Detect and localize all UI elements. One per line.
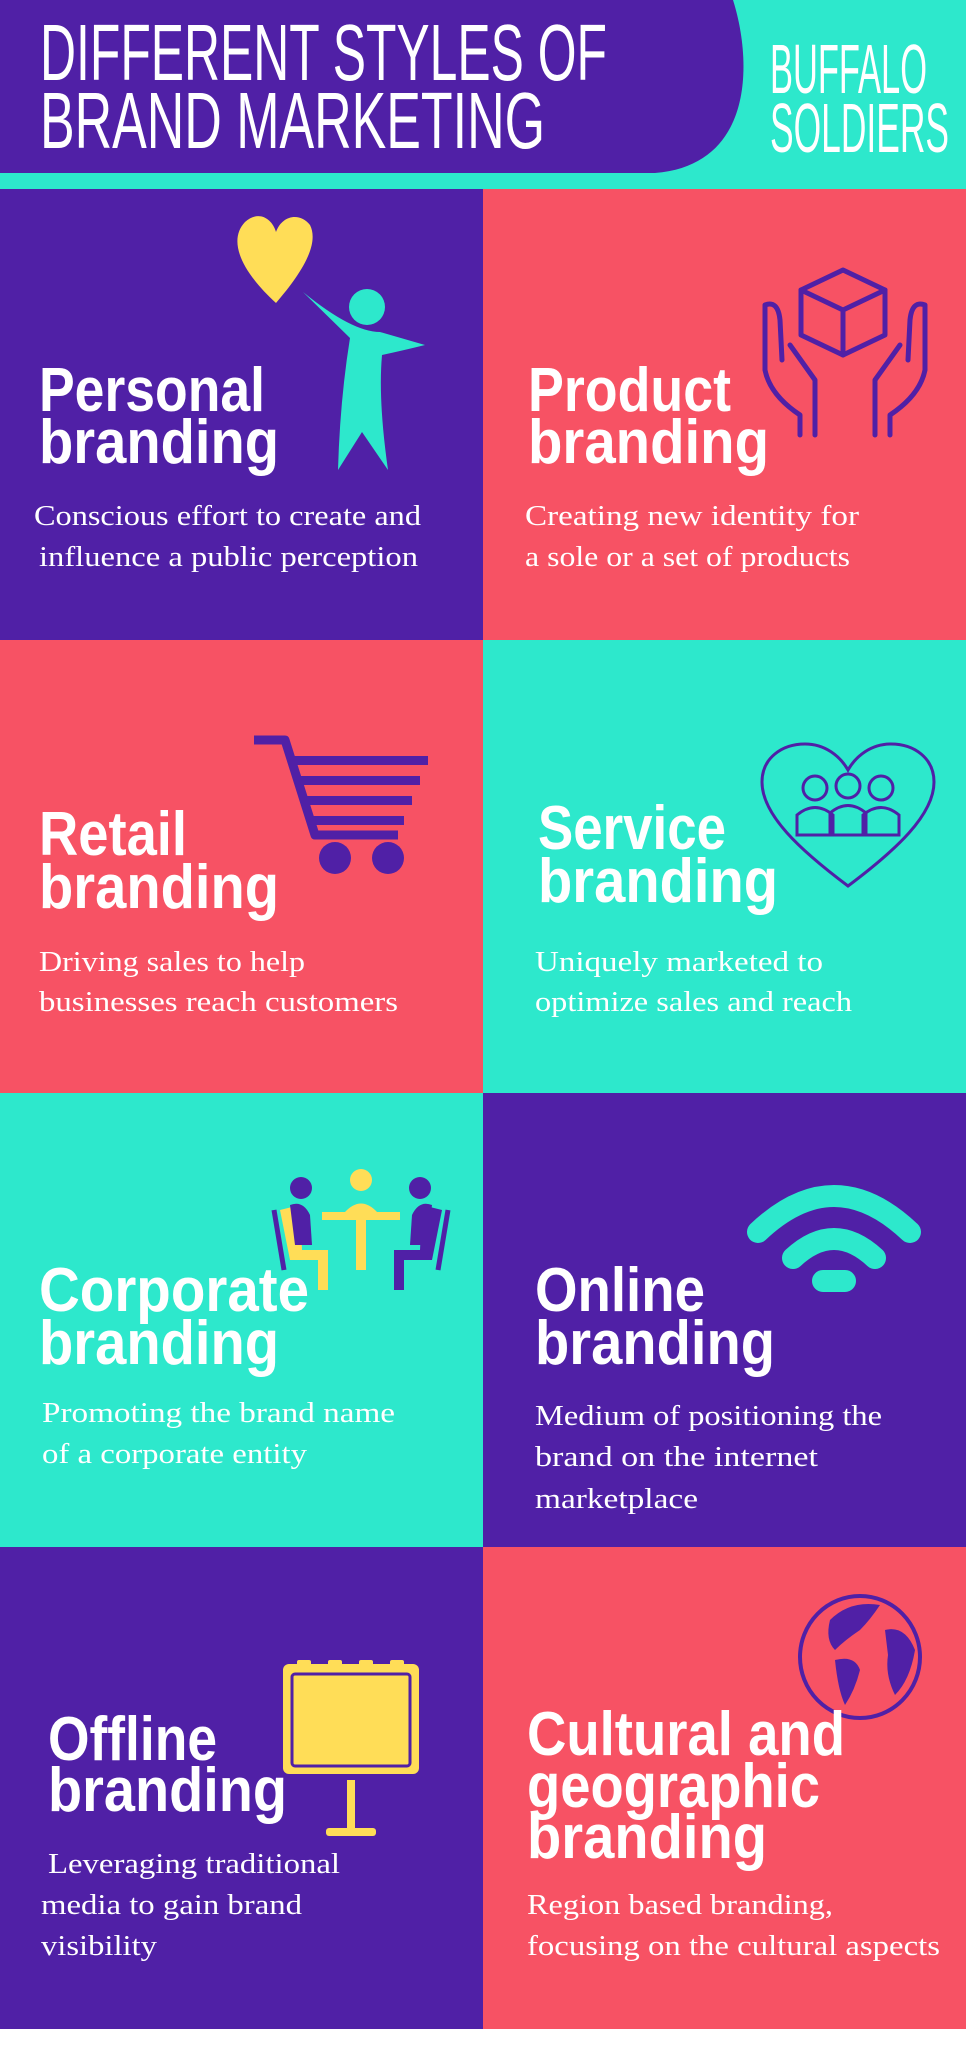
icon: billboard: [283, 1660, 419, 1836]
text block: Creating new identity for: [525, 500, 859, 532]
heading: Service: [538, 794, 726, 863]
heading: Cultural and: [527, 1700, 845, 1769]
text block: influence a public perception: [39, 541, 419, 573]
heading: branding: [48, 1756, 287, 1825]
heading: [528, 356, 769, 477]
text block: optimize sales and reach: [535, 986, 853, 1018]
text block: [41, 1848, 340, 1962]
logo: Buffalo Soldiers: [770, 30, 949, 167]
text block: [34, 500, 422, 573]
text block: [42, 1397, 395, 1470]
heading: [39, 800, 279, 922]
heading: branding: [39, 1309, 279, 1378]
text block: businesses reach customers: [39, 986, 398, 1018]
text block: Driving sales to help: [39, 946, 305, 978]
text block: [39, 946, 398, 1018]
text block: of a corporate entity: [42, 1438, 308, 1470]
text block: Region based branding,: [527, 1889, 833, 1921]
text block: [527, 1889, 940, 1962]
text block: marketplace: [535, 1483, 698, 1515]
text block: media to gain brand: [41, 1889, 303, 1921]
heading: Product: [528, 356, 731, 425]
text block: [535, 946, 853, 1018]
icon: wifi: [758, 1196, 910, 1288]
heading: Retail: [39, 800, 187, 869]
panel: corporate branding: [0, 1093, 483, 1547]
text block: Conscious effort to create and: [34, 500, 422, 532]
heading: Offline: [48, 1705, 217, 1774]
text block: [525, 500, 859, 573]
heading: [48, 1705, 287, 1825]
panel: service branding: [483, 640, 966, 1093]
panel: online branding: [483, 1093, 966, 1547]
icon: globe: [800, 1596, 920, 1718]
header band: [0, 0, 966, 189]
icon: hands holding box: [765, 270, 925, 435]
panel: personal branding: [0, 189, 483, 640]
text block: [535, 1400, 882, 1515]
text block: Uniquely marketed to: [535, 946, 823, 978]
text block: Medium of positioning the: [535, 1400, 882, 1432]
text block: focusing on the cultural aspects: [527, 1930, 940, 1962]
panel: offline branding: [0, 1547, 483, 2029]
text block: a sole or a set of products: [525, 541, 850, 573]
heading: [535, 1256, 775, 1378]
panel: cultural and geographic branding: [483, 1547, 966, 2029]
heading: [39, 356, 279, 477]
heading: [538, 794, 778, 916]
heading: [39, 1256, 309, 1378]
title: [40, 8, 607, 165]
icon: heart and person: [237, 216, 425, 470]
heading: branding: [39, 853, 279, 922]
heading: branding: [528, 408, 769, 477]
panel: product branding: [483, 189, 966, 640]
text block: brand on the internet: [535, 1441, 818, 1473]
icon: heart with people: [762, 744, 934, 886]
heading: branding: [527, 1803, 767, 1872]
heading: geographic: [527, 1752, 820, 1821]
title: BRAND MARKETING: [40, 76, 545, 165]
heading: Personal: [39, 356, 265, 425]
text block: visibility: [41, 1930, 158, 1962]
text block: Promoting the brand name: [42, 1397, 395, 1429]
icon: meeting table: [274, 1169, 448, 1290]
panel: retail branding: [0, 640, 483, 1093]
title: DIFFERENT STYLES OF: [40, 8, 607, 97]
heading: [527, 1700, 845, 1872]
heading: branding: [538, 847, 778, 916]
heading: Corporate: [39, 1256, 309, 1325]
heading: Online: [535, 1256, 705, 1325]
heading: branding: [535, 1309, 775, 1378]
heading: branding: [39, 408, 279, 477]
icon: shopping cart: [254, 740, 428, 874]
text block: Leveraging traditional: [48, 1848, 340, 1880]
